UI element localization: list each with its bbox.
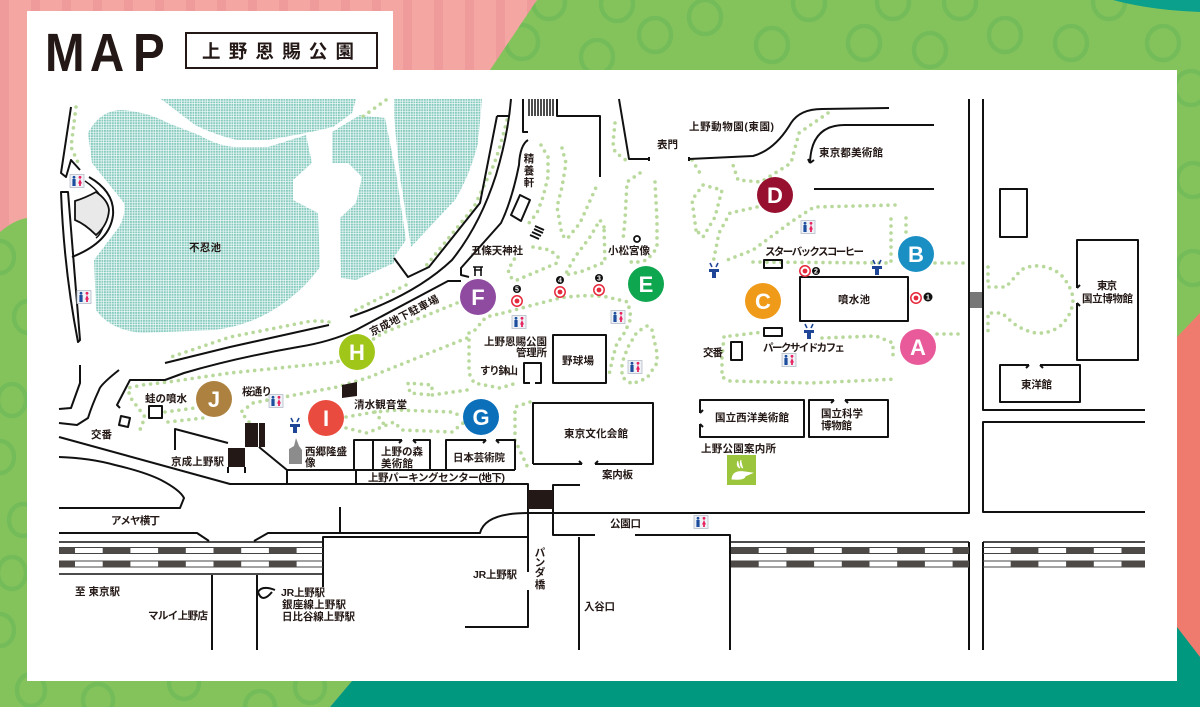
place name labels: 五條天神社 bbox=[471, 244, 524, 257]
restroom icons bbox=[70, 174, 815, 528]
place name labels: 表門 bbox=[657, 138, 678, 151]
heading: park name box bbox=[186, 33, 377, 68]
place name labels: 桜通り bbox=[242, 385, 272, 398]
footpaths: dotted walking routes bbox=[71, 100, 1073, 468]
pond: Shinobazu bbox=[88, 99, 482, 333]
place name labels: 上野の森 bbox=[381, 445, 424, 458]
statue: Saigo bbox=[289, 438, 302, 464]
place name labels: 上野パーキングセンター(地下) bbox=[368, 471, 505, 484]
place name labels: 京成上野駅 bbox=[171, 455, 224, 468]
place name labels: 交番 bbox=[91, 429, 112, 441]
place name labels: 案内板 bbox=[602, 468, 634, 481]
numbered target markers: 2 bbox=[814, 268, 818, 276]
place name labels: 軒 bbox=[524, 176, 535, 189]
place name labels: 国立西洋美術館 bbox=[715, 411, 790, 424]
place name labels: 国立博物館 bbox=[1082, 292, 1134, 305]
marker D: D bbox=[767, 183, 783, 208]
marker A: A bbox=[910, 335, 926, 360]
place name labels: アメヤ横丁 bbox=[111, 514, 160, 527]
marker G bbox=[463, 399, 499, 435]
place name labels: 養 bbox=[524, 164, 535, 177]
crosswalk: grey road crossing bbox=[970, 292, 982, 308]
marker F: F bbox=[471, 285, 485, 310]
marker A bbox=[900, 329, 936, 365]
rail tracks dashes bbox=[59, 550, 1145, 564]
background: teal shape bottom bbox=[330, 627, 1200, 707]
place name labels: 銀座線上野駅 bbox=[282, 598, 346, 611]
icon: information centre bbox=[727, 455, 756, 485]
marker I: I bbox=[323, 406, 329, 431]
marker J bbox=[196, 381, 232, 417]
place name labels: 上野動物園(東園) bbox=[689, 120, 774, 133]
place name labels: 交番 bbox=[703, 347, 724, 359]
place name labels: 博物館 bbox=[821, 419, 852, 432]
numbered target markers: 5 bbox=[515, 286, 519, 294]
marker D bbox=[757, 177, 793, 213]
marker F bbox=[460, 279, 496, 315]
marker J: J bbox=[208, 387, 220, 412]
title: MAP: MAP bbox=[45, 22, 165, 83]
place name labels: ン bbox=[535, 557, 545, 569]
place name labels: ダ bbox=[535, 566, 546, 579]
marker E: E bbox=[639, 272, 653, 297]
place name labels: 蛙の噴水 bbox=[145, 392, 188, 405]
place name labels: 噴水池 bbox=[838, 293, 870, 306]
grey shape: grey Benten hall bbox=[75, 192, 109, 235]
place name labels: 国立科学 bbox=[821, 407, 863, 420]
place name labels: スターバックスコーヒー bbox=[765, 246, 864, 258]
place name labels: 日比谷線上野駅 bbox=[282, 610, 356, 623]
drinking fountain icons bbox=[290, 260, 882, 433]
place name labels: すり鉢山 bbox=[480, 364, 518, 377]
place name labels: 西郷隆盛 bbox=[305, 445, 348, 458]
place name labels: 像 bbox=[305, 456, 316, 469]
monument: Komatsu statue marker bbox=[634, 236, 640, 242]
place name labels: 精 bbox=[524, 152, 535, 165]
background: salmon shape right bbox=[1177, 313, 1200, 700]
place name labels: 橋 bbox=[535, 578, 546, 591]
numbered target markers bbox=[512, 266, 932, 306]
place name labels: 公園口 bbox=[610, 518, 641, 530]
marker I bbox=[308, 400, 344, 436]
marker B: B bbox=[908, 242, 924, 267]
place name labels: 東京文化会館 bbox=[564, 427, 628, 440]
marker C: C bbox=[755, 289, 771, 314]
roads: black street lines bbox=[59, 99, 1145, 650]
place name labels: 小松宮像 bbox=[608, 244, 650, 257]
place name labels: パ bbox=[535, 547, 546, 559]
numbered target markers: 4 bbox=[558, 278, 562, 284]
heading: park name box: 上野恩賜公園 bbox=[202, 41, 354, 62]
background: teal corner top right bbox=[1113, 0, 1200, 12]
place name labels: 日本芸術院 bbox=[453, 451, 506, 464]
place name labels: 管理所 bbox=[516, 346, 548, 359]
place name labels: 上野公園案内所 bbox=[701, 442, 776, 455]
place name labels: 清水観音堂 bbox=[354, 398, 407, 411]
place name labels: 不忍池 bbox=[189, 241, 222, 254]
marker C bbox=[745, 283, 781, 319]
place name labels: 京成地下駐車場 bbox=[367, 292, 442, 339]
numbered target markers: 3 bbox=[597, 276, 601, 282]
place name labels: マルイ上野店 bbox=[148, 609, 208, 622]
marker B bbox=[898, 236, 934, 272]
marker H bbox=[339, 334, 375, 370]
buildings: black station blocks bbox=[228, 382, 553, 509]
marker G: G bbox=[472, 405, 490, 430]
marker E bbox=[628, 266, 664, 302]
place name labels: 東京 bbox=[1097, 279, 1118, 292]
place name labels: 東洋館 bbox=[1021, 378, 1052, 391]
place name labels: パークサイドカフェ bbox=[763, 342, 845, 354]
place name labels: 東京都美術館 bbox=[819, 146, 884, 159]
place name labels bbox=[75, 120, 1134, 623]
place name labels: 上野恩賜公園 bbox=[484, 335, 547, 348]
place name labels: JR上野駅 bbox=[473, 568, 518, 581]
torii icon bbox=[473, 267, 483, 276]
place name labels: 野球場 bbox=[562, 354, 594, 367]
marker H: H bbox=[349, 340, 365, 365]
place name labels: 美術館 bbox=[381, 457, 414, 470]
place name labels: 至 東京駅 bbox=[75, 585, 120, 598]
place name labels: 入谷口 bbox=[584, 600, 615, 613]
numbered target markers: 1 bbox=[926, 294, 930, 302]
place name labels: JR上野駅 bbox=[281, 586, 326, 599]
